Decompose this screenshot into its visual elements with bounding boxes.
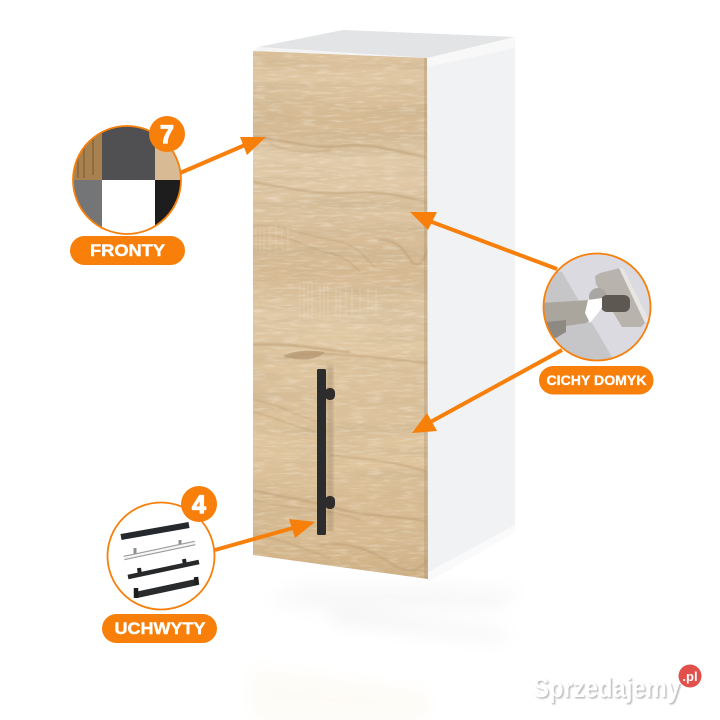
- lower standoff: [325, 496, 335, 509]
- light wood swatch: [155, 148, 180, 180]
- dark wood patch: [283, 351, 325, 359]
- graphite swatch: [102, 125, 155, 180]
- label pill: CICHY DOMYK: [546, 373, 647, 388]
- label pill: [102, 614, 217, 643]
- watermark shadow text: Sprzedajemy: [534, 674, 682, 704]
- watermark badge: [678, 664, 702, 688]
- large grain texture: [250, 48, 432, 583]
- watermark: [533, 664, 702, 704]
- floor shadow and reflection: [253, 585, 520, 720]
- dark wood grain: [78, 135, 93, 178]
- black swatch: [155, 180, 180, 225]
- handle samples: [121, 525, 199, 598]
- cabinet: [250, 30, 515, 583]
- wood door: [250, 48, 432, 583]
- count badge: 7: [160, 121, 174, 149]
- photo background: [558, 254, 650, 358]
- hinge knuckle: [601, 295, 630, 312]
- count badge: [181, 486, 217, 522]
- side top edge: [427, 37, 515, 67]
- hinge arm lower: [546, 320, 566, 338]
- watermark text: Sprzedajemy: [533, 672, 680, 703]
- circle outline: [544, 254, 650, 360]
- hinge photo: [544, 254, 650, 360]
- hinge arm: [544, 300, 589, 326]
- hinge cup: [589, 288, 606, 300]
- handle shadow: [327, 366, 333, 531]
- hinge cup plate: [595, 268, 647, 327]
- arrow: fronty to door: [180, 137, 266, 173]
- dark wood swatch: [74, 133, 102, 180]
- cabinet top face: [258, 30, 515, 58]
- pale crosshatch patches: [256, 226, 376, 320]
- arrow: handles to bar: [215, 519, 315, 550]
- label pill: FRONTY: [90, 242, 165, 260]
- hinge bright tab: [585, 298, 602, 323]
- count badge: [149, 116, 185, 152]
- count badge: 4: [192, 491, 206, 519]
- panel: cichy domyk: [539, 250, 655, 394]
- cabinet side face: [427, 37, 515, 582]
- door base colour: [250, 48, 432, 583]
- handle sample 3: [128, 559, 199, 577]
- darker wall area: [544, 272, 612, 360]
- upper standoff: [325, 388, 335, 400]
- handle sample 1: [121, 525, 189, 537]
- label pill: [70, 236, 185, 265]
- door right edge shade: [424, 58, 428, 583]
- label pill: UCHWYTY: [114, 620, 206, 638]
- arrow: hinge to door bottom: [412, 350, 562, 433]
- black handle: [317, 369, 335, 535]
- panel: fronty: [70, 116, 185, 265]
- side bottom edge: [428, 525, 515, 582]
- handle sample 4: [136, 577, 197, 598]
- watermark badge: .pl: [682, 669, 698, 684]
- cabinet front top edge: [253, 47, 428, 60]
- handle sample 2: [124, 540, 195, 558]
- panel: uchwyty: [102, 486, 217, 643]
- circle: [108, 502, 214, 610]
- hinge plate highlight: [619, 268, 649, 323]
- label pill: [539, 366, 654, 394]
- fine grain texture: [250, 48, 432, 583]
- arrow: hinge to door top: [410, 212, 557, 269]
- handle bar: [317, 369, 326, 535]
- white swatch: [102, 180, 155, 236]
- circle outline: [73, 126, 181, 234]
- hand drawn grain lines: [253, 137, 427, 570]
- swatch circle: [74, 126, 180, 227]
- grey swatch: [74, 180, 102, 227]
